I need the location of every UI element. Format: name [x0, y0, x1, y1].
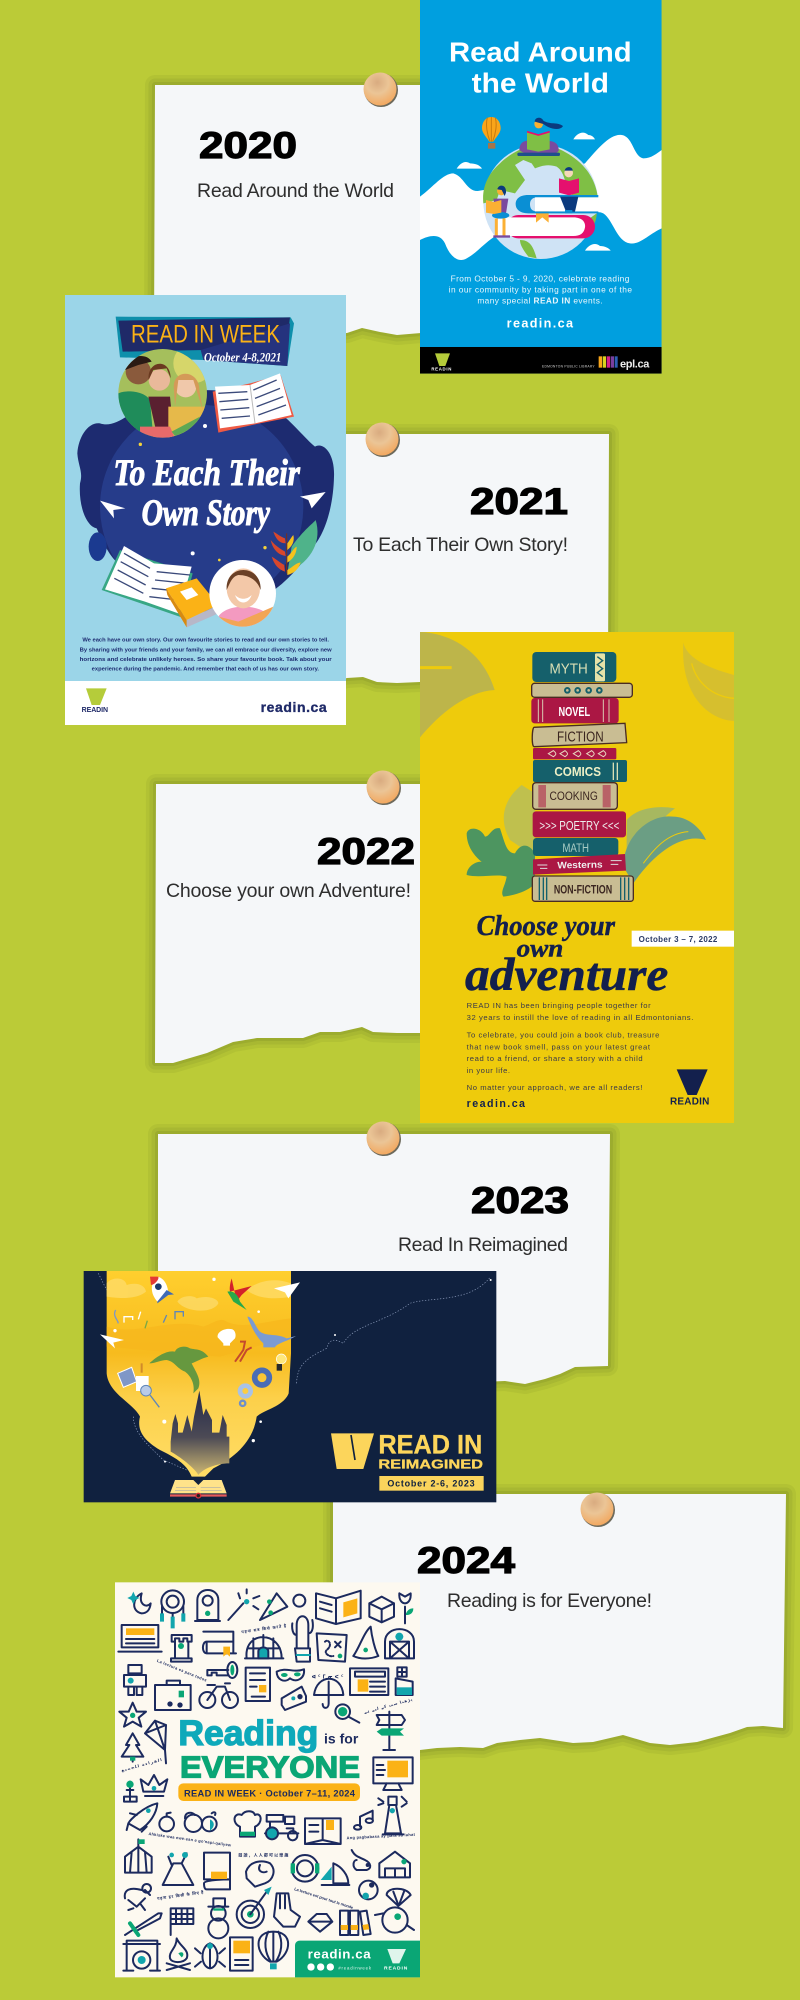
book stack: COMICS: [554, 764, 601, 779]
text: poster body: that new book smell, pass on your latest great: [467, 1042, 651, 1051]
text: READ IN WEEK: READ IN WEEK: [131, 322, 280, 349]
text: readin.ca: readin.ca: [467, 1098, 525, 1110]
footer tab: READIN: [384, 1965, 408, 1971]
book stack: >>> POETRY <<<: [539, 819, 619, 833]
text: poster body: By sharing with your friends and your family, we can all embrace our diversity, explore new: [80, 647, 332, 653]
clouds: [107, 1279, 291, 1311]
heading: 2021: 2021: [470, 481, 568, 522]
text: poster body: From October 5 - 9, 2020, celebrate reading: [451, 274, 630, 284]
icon: 2024 pin: [580, 1492, 615, 1527]
icon: gears: [240, 1370, 269, 1406]
logo: READIN: [82, 707, 108, 714]
icon: 2023 pin: [366, 1122, 401, 1156]
text: poster script title: [113, 453, 300, 534]
book stack: [531, 652, 633, 901]
panel: 2021 torn paper note: [300, 434, 609, 690]
text: multilingual captions: [121, 1623, 416, 1910]
logo: [82, 688, 108, 714]
text: Reading: Reading: [178, 1714, 318, 1753]
text: is for: is for: [324, 1730, 359, 1746]
icon: seated reader on globe: [517, 118, 563, 156]
poster footer: [420, 347, 662, 374]
text: poster body: read to a friend, or share a story with a child: [467, 1054, 643, 1063]
icon: open book upper right: [213, 373, 294, 433]
text: poster body: To celebrate, you could join a book club, treasure: [467, 1030, 659, 1039]
text: poster title: Read Around: [449, 37, 632, 68]
text: multilingual captions: القراءة للجميع: [121, 1757, 163, 1773]
date pill: READ IN WEEK · October 7–11, 2024: [184, 1788, 356, 1798]
text: poster body: many special READ IN events.: [477, 295, 603, 305]
panel: 2023 torn paper note: [158, 1134, 610, 1395]
flame of imagination: [107, 1271, 291, 1477]
date pill: [178, 1783, 360, 1801]
stars: [191, 424, 207, 555]
poster: To Each Their Own Story: [65, 295, 346, 725]
book stack: COOKING: [549, 789, 598, 803]
icon: 2021 pin: [366, 422, 400, 457]
icon: dinosaur: [247, 1317, 296, 1347]
text: poster title: the World: [472, 68, 609, 99]
date box: October 2-6, 2023: [387, 1479, 475, 1489]
text: poster body: experience during the pandemic. And remember that each of us has our own story.: [92, 667, 319, 673]
icon: paper planes: [100, 492, 326, 518]
date box: [632, 931, 734, 947]
text: 2024 theme: Reading is for Everyone!: [447, 1590, 652, 1612]
text: multilingual captions: Ahkiske waa ewe-ean e go'napi-qaliyew: [148, 1831, 232, 1848]
icon: hot air balloon: [482, 117, 501, 149]
text: multilingual captions: पढ़ना हर किसी के लिए है: [156, 1889, 205, 1901]
photo of child: [209, 560, 276, 627]
text: multilingual captions: ᐊᑦᒥᓂᐸᑦ: [312, 1674, 343, 1679]
poster: Read Around the World: [420, 0, 662, 374]
icon: parrot: [227, 1278, 252, 1310]
icon: open book: [170, 1480, 227, 1499]
navy blob: [77, 390, 334, 612]
text: multilingual captions: La lecture est pour tout le monde: [294, 1886, 355, 1910]
footer tab: #readinweek: [338, 1965, 372, 1970]
text: poster body: [80, 638, 333, 673]
icon: oak leaf: [467, 828, 535, 897]
poster footer: READIN: [431, 367, 451, 372]
poster: Read In Reimagined: [84, 1271, 496, 1502]
text: script title: adventure: [465, 949, 668, 1001]
book stack: MYTH: [549, 661, 588, 677]
text: multilingual captions: پڑھنا سب کے لیے ہے: [363, 1696, 413, 1714]
poster footer: EDMONTON PUBLIC LIBRARY: [542, 364, 595, 368]
logo: [670, 1069, 709, 1107]
logo: READ IN REIMAGINED: [331, 1429, 483, 1471]
text: 2022 theme: Choose your own Adventure!: [166, 880, 411, 902]
heading: 2022: 2022: [317, 831, 415, 872]
text: poster body: No matter your approach, we are all readers!: [467, 1083, 642, 1092]
text: multilingual captions: Ang pagbabasa ay para sa lahat: [346, 1832, 416, 1840]
stars: [113, 1278, 492, 1463]
icon: castle: [171, 1391, 229, 1475]
text: poster script title: To Each Their: [113, 453, 300, 494]
bottom book: [495, 211, 595, 238]
date box: October 3 – 7, 2022: [639, 935, 718, 944]
icon: 2022 pin: [366, 770, 401, 805]
book stack: FICTION: [557, 729, 604, 745]
text: readin.ca: readin.ca: [261, 699, 327, 715]
heading: 2024: 2024: [417, 1540, 516, 1581]
leaves: [420, 632, 734, 737]
icon: lightbulb: [276, 1354, 286, 1371]
icon: dragon: [149, 1347, 208, 1393]
text: poster script title: Own Story: [142, 493, 270, 534]
text: multilingual captions: पढ़ना सब किसे करते है: [240, 1623, 287, 1634]
panel: 2024 torn paper note: [333, 1494, 786, 1760]
icon: paper and magnifier: [118, 1363, 159, 1407]
logo: READIN: [670, 1096, 709, 1107]
icon: reader with pink book: [559, 167, 579, 213]
text: script title: own: [517, 935, 563, 963]
text: poster body: horizons and celebrate unlikely heroes. So share your favourite book. Talk about your: [80, 657, 333, 663]
photo of readers: [118, 349, 207, 438]
text: date: October 4-8,2021: [204, 351, 281, 365]
text: multilingual captions: La lectura es para todos: [156, 1658, 208, 1683]
icon: paper planes: [100, 1282, 300, 1348]
icon: chef hat: [218, 1329, 236, 1346]
text: poster body: [449, 274, 632, 305]
text: poster body: READ IN has been bringing people together for: [467, 1001, 651, 1010]
footer tab: [295, 1941, 420, 1977]
text: poster body: [467, 1001, 693, 1092]
panel: 2022 torn paper note: [155, 784, 421, 1063]
icon: open book lower left: [102, 546, 193, 617]
icon: girl with orange book: [486, 186, 510, 238]
icon: spatula and fork: [235, 1342, 252, 1362]
dotted trail: [98, 1273, 491, 1470]
icon: leaves: [271, 520, 318, 575]
text: poster title: [450, 42, 630, 93]
icon grid: [118, 1589, 414, 1971]
panel: 2020 torn paper note: [154, 85, 421, 340]
poster footer: epl.ca: [620, 359, 650, 371]
text: script title: Choose your: [477, 910, 616, 942]
text: poster body: in your life.: [467, 1066, 510, 1075]
banner: [116, 317, 294, 366]
logo: READ IN REIMAGINED: REIMAGINED: [378, 1456, 483, 1471]
heading: 2023: 2023: [471, 1180, 569, 1221]
text: readin.ca: readin.ca: [507, 316, 574, 330]
text: poster body: We each have our own story. Our own favourite stories to read and our own stories to tell.: [82, 638, 329, 644]
icon: rocket: [150, 1277, 174, 1303]
text: multilingual captions: 閱讀，人人都可以樂趣: [238, 1852, 288, 1858]
logo: READ IN REIMAGINED: READ IN: [378, 1429, 482, 1459]
icon: 2020 pin: [364, 72, 398, 107]
book stack: NON-FICTION: [554, 883, 612, 896]
text: 2020 theme: Read Around the World: [197, 180, 394, 202]
book stack: Westerns: [557, 860, 603, 870]
footer tab: readin.ca: [308, 1946, 371, 1961]
text: poster body: in our community by taking part in one of the: [449, 285, 632, 295]
poster: Choose your own adventure: [420, 632, 734, 1123]
heading: 2020: 2020: [199, 125, 297, 166]
top book: [516, 195, 598, 213]
icon: yellow book: [166, 578, 218, 627]
text: 2023 theme: Read In Reimagined: [398, 1234, 568, 1256]
text: script title: [465, 914, 668, 991]
text: EVERYONE: EVERYONE: [180, 1749, 360, 1784]
book stack: MATH: [562, 841, 589, 855]
book stack: NOVEL: [558, 705, 590, 719]
music notes: [115, 1310, 183, 1328]
date box: [379, 1476, 484, 1491]
poster: Reading is for Everyone: [115, 1582, 420, 1977]
text: poster body: 32 years to instill the love of reading in all Edmontonians.: [467, 1013, 693, 1022]
text: 2021 theme: To Each Their Own Story!: [353, 534, 568, 556]
